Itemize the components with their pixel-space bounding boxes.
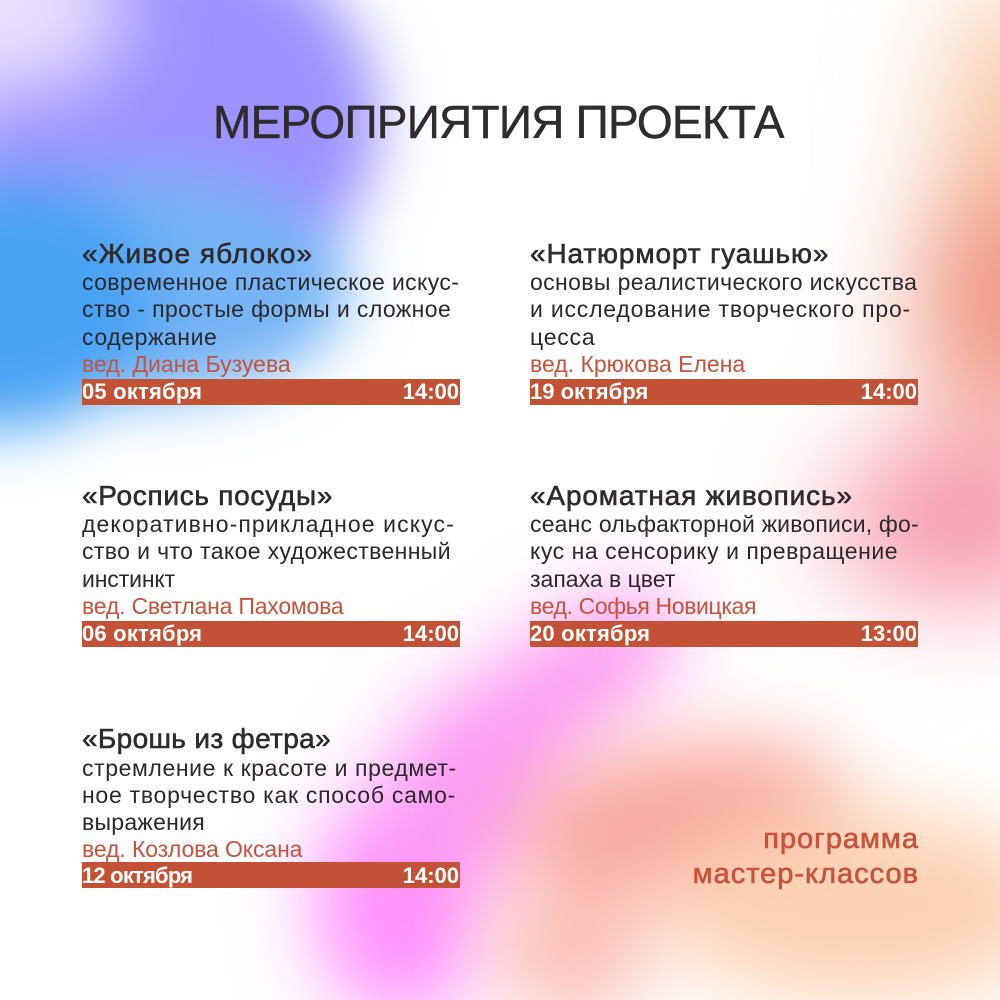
card: Брошь из фетра: вед. Козлова Оксана: [82, 836, 302, 862]
card: Роспись посуды: «Роспись посуды»: [82, 480, 333, 511]
date bar: 19 октября: [530, 379, 648, 404]
program label: программа: [763, 823, 919, 855]
program label: [693, 823, 919, 890]
date bar: 12 октября: [82, 863, 192, 888]
date bar: 14:00: [861, 379, 917, 404]
card: Живое яблоко: [82, 238, 460, 405]
date bar: [82, 621, 460, 647]
card: Роспись посуды: [82, 480, 460, 647]
card: Натюрморт гуашью: [530, 238, 918, 405]
date bar: 13:00: [861, 621, 917, 646]
card: Натюрморт гуашью: основы реалистического искусства: [530, 269, 917, 295]
card: Ароматная живопись: вед. Софья Новицкая: [530, 593, 756, 619]
card: Натюрморт гуашью: вед. Крюкова Елена: [530, 351, 745, 377]
date bar: [82, 379, 460, 405]
card: Ароматная живопись: запаха в цвет: [530, 566, 675, 592]
card: Роспись посуды: декоративно-прикладное искус-: [82, 511, 455, 537]
card: Натюрморт гуашью: цесса: [530, 324, 595, 350]
card: Ароматная живопись: [530, 480, 919, 647]
card: Натюрморт гуашью: и исследование творческого про-: [530, 296, 911, 322]
card: Роспись посуды: вед. Светлана Пахомова: [82, 593, 343, 619]
card: Брошь из фетра: «Брошь из фетра»: [82, 723, 331, 754]
date bar: 20 октября: [530, 621, 650, 646]
card: Брошь из фетра: стремление к красоте и предмет-: [82, 755, 457, 781]
title: МЕРОПРИЯТИЯ ПРОЕКТА: [213, 96, 784, 148]
card: Живое яблоко: «Живое яблоко»: [82, 238, 313, 269]
date bar: 05 октября: [82, 379, 202, 404]
card: Живое яблоко: вед. Диана Бузуева: [82, 351, 291, 377]
card: Роспись посуды: ство и что такое художественный: [82, 538, 451, 564]
card: Брошь из фетра: [82, 723, 460, 888]
date bar: 14:00: [403, 863, 459, 888]
date bar: [82, 862, 460, 888]
card: Брошь из фетра: ное творчество как способ само-: [82, 782, 456, 808]
card: Живое яблоко: современное пластическое искус-: [82, 269, 459, 295]
card: Живое яблоко: ство - простые формы и сложное: [82, 296, 451, 322]
date bar: 06 октября: [82, 621, 202, 646]
card: Живое яблоко: содержание: [82, 324, 217, 350]
date bar: [530, 621, 918, 647]
date bar: [530, 379, 918, 405]
date bar: 14:00: [403, 621, 459, 646]
date bar: 14:00: [403, 379, 459, 404]
card: Ароматная живопись: сеанс ольфакторной живописи, фо-: [530, 511, 919, 537]
card: Ароматная живопись: кус на сенсорику и превращение: [530, 538, 898, 564]
program label: мастер-классов: [693, 858, 919, 890]
card: Ароматная живопись: «Ароматная живопись»: [530, 480, 853, 511]
card: Натюрморт гуашью: «Натюрморт гуашью»: [530, 238, 829, 269]
card: Брошь из фетра: выражения: [82, 809, 205, 835]
card: Роспись посуды: инстинкт: [82, 566, 175, 592]
